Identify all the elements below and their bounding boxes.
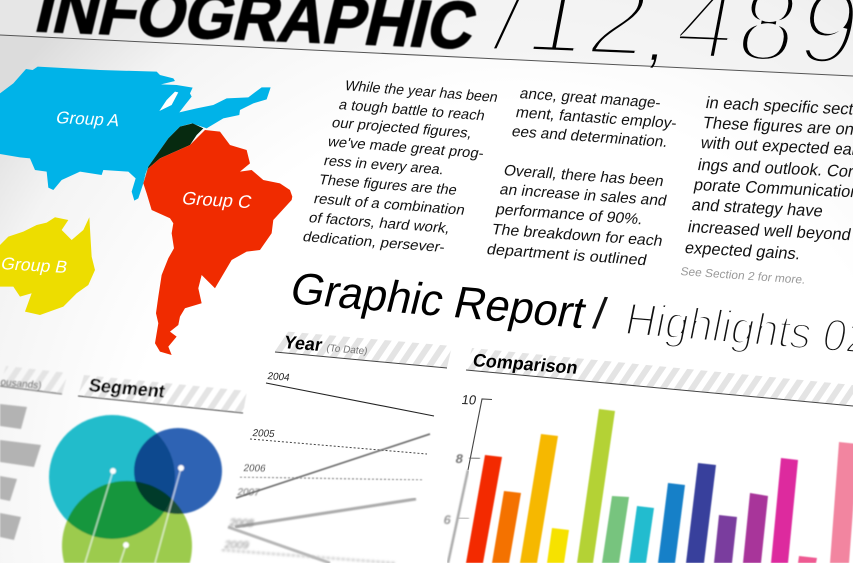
title: total number (486, 0, 853, 87)
year line 2008 falling (228, 527, 330, 563)
map (0, 67, 292, 355)
body copy column 2: Overall, there has been (502, 162, 665, 190)
body copy column 1: a tough battle to reach (337, 97, 487, 124)
body copy column 1: result of a combination (312, 191, 467, 219)
year header stripes (275, 331, 452, 368)
year line 2005 (250, 439, 427, 454)
panel: comparison (442, 348, 853, 563)
venn: leader lines (85, 465, 184, 563)
axis label 8: 8 (454, 451, 464, 466)
body copy column 2: ment, fantastic employ- (514, 104, 678, 132)
body copy column 2: ance, great manage- (518, 85, 663, 112)
year heading note: (To Date) (325, 343, 368, 357)
body copy column 1: ress in every area. (322, 153, 446, 178)
left section header (0, 366, 68, 394)
venn: green circle (62, 481, 192, 563)
segment header stripes (78, 375, 247, 413)
year label 2006: 2006 (242, 463, 267, 475)
body copy column 2: ees and determination. (510, 123, 669, 151)
axis label 10: 10 (460, 392, 478, 407)
body copy column 2: department is outlined (485, 241, 648, 269)
body copy column 2 (485, 85, 678, 269)
map: group C region (143, 130, 292, 355)
year label 2008: 2008 (228, 517, 255, 530)
comparison header stripes (466, 348, 853, 406)
axis upper (468, 399, 492, 470)
venn: teal circle (49, 415, 175, 539)
map: group A region (0, 67, 271, 201)
panel: year (222, 331, 452, 563)
map label: group A: Group A (54, 107, 122, 130)
map: great lake (159, 92, 178, 111)
panel: left gray bars (0, 404, 41, 540)
body copy column 1: our projected figures, (330, 115, 474, 142)
body copy column 1: These figures are the (317, 172, 459, 199)
venn diagram (49, 415, 222, 563)
body copy column 1 (301, 78, 500, 256)
body copy column 3: and strategy have (690, 195, 825, 221)
segment heading: Segment (87, 375, 167, 401)
body copy column 1: While the year has been (343, 78, 500, 106)
axis label 6: 6 (442, 512, 452, 527)
comparison heading: Comparison (471, 350, 580, 378)
year label 2004: 2004 (266, 371, 291, 384)
see section note: See Section 2 for more. (679, 265, 807, 287)
map label: group B: Group B (0, 253, 70, 277)
map: group B region (0, 217, 95, 315)
year label 2009: 2009 (223, 539, 250, 552)
body copy column 1: of factors, hard work, (307, 210, 452, 237)
year line 2007 (236, 434, 430, 498)
year label 2007: 2007 (236, 487, 261, 499)
title: total number: , (642, 4, 673, 75)
body copy column 2: The breakdown for each (490, 221, 664, 250)
year line 2009 (222, 550, 395, 563)
header band (0, 0, 853, 76)
body copy column 2: an increase in sales and (498, 181, 668, 210)
report slash: / (591, 289, 610, 339)
panel: segment (78, 375, 247, 413)
body copy column 2: performance of 90%. (494, 201, 645, 228)
body copy column 3: expected gains. (683, 238, 802, 263)
bar chart (466, 409, 853, 563)
report heading: Graphic Report (286, 265, 591, 338)
body copy column 1: we've made great prog- (325, 134, 486, 162)
left section header: ousands) (0, 377, 42, 392)
year line 2004 (266, 383, 434, 416)
year line 2006 (240, 477, 422, 480)
body copy column 1: dedication, persever- (301, 229, 447, 256)
year label 2005: 2005 (251, 428, 276, 440)
body copy column 3 (683, 93, 853, 263)
year line 2008 (235, 499, 416, 527)
venn: blue circle (134, 428, 222, 514)
map: dark overlap (143, 123, 203, 183)
year heading: Year (282, 332, 324, 355)
header rule (0, 35, 853, 76)
axis lower (448, 470, 468, 563)
body copy column 3: increased well beyond (686, 217, 853, 244)
map label: group C: Group C (180, 187, 254, 212)
